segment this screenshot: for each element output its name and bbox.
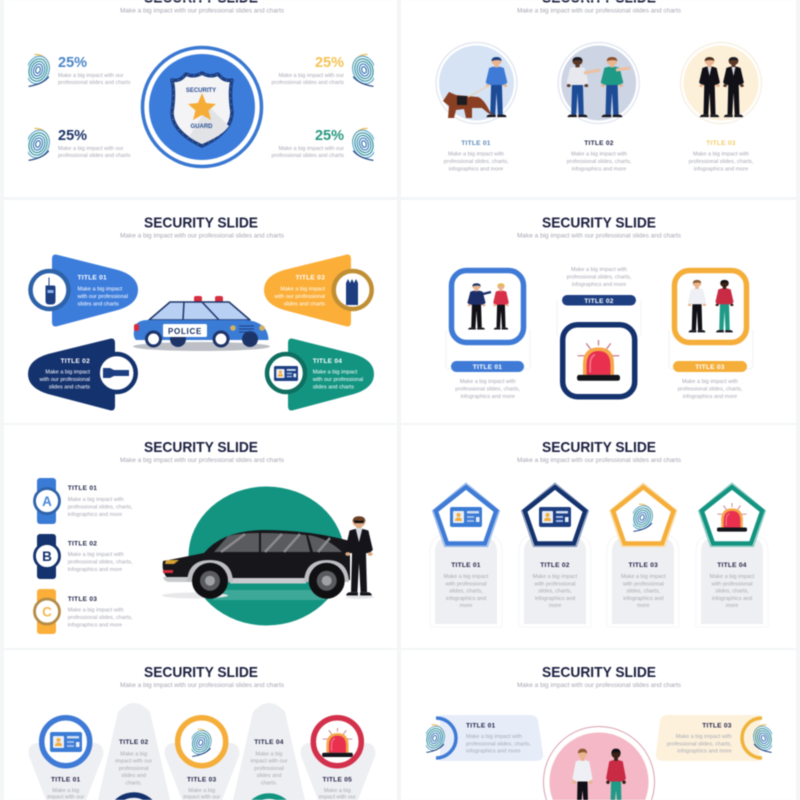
heading: SECURITY SLIDE — [542, 664, 656, 681]
column 04 background — [233, 703, 305, 800]
list item C: infographics and more — [68, 622, 122, 628]
callout: title 04: TITLE 04 — [313, 358, 342, 365]
card 02: with professional — [534, 581, 575, 587]
heading: SECURITY SLIDE — [144, 664, 258, 681]
column 04: professional — [254, 766, 284, 772]
panel: police car — [4, 200, 397, 423]
column 01 — [29, 718, 103, 800]
callout: title 03 — [264, 254, 372, 326]
callout: title 03: Make a big impact — [280, 286, 325, 292]
column 03: Make a big — [188, 788, 215, 794]
card: officer and guest: professional slides, charts, — [678, 386, 743, 392]
callout: title 04: Make a big impact — [313, 370, 358, 376]
title 03: Make a big impact with — [693, 152, 749, 158]
heading: SECURITY SLIDE — [144, 439, 258, 456]
card 04: more — [726, 603, 738, 609]
icon: fingerprint top right — [349, 53, 379, 87]
title 01: Make a big impact with — [448, 152, 504, 158]
card 01: TITLE 01 — [451, 562, 481, 569]
column 04 — [250, 739, 288, 800]
illustration: pink circle with two people — [544, 726, 654, 800]
subheading: Make a big impact with our professional slides and charts — [120, 232, 284, 240]
stat: top left: professional slides and charts — [58, 80, 131, 86]
subheading: Make a big impact with our professional slides and charts — [517, 682, 681, 689]
column 04: slides and — [257, 773, 281, 779]
card: guard and visitor: professional slides, charts, — [455, 386, 521, 392]
subheading: Make a big impact with our professional slides and charts — [120, 457, 284, 464]
stat: bottom left: 25% — [58, 128, 87, 144]
card: title 03: TITLE 03 — [702, 722, 732, 730]
card 03: Make a big impact — [621, 574, 666, 580]
card: alarm beacon — [557, 267, 641, 397]
list item B — [34, 534, 133, 579]
panel: limousine and bodyguard — [4, 425, 397, 648]
title 02 — [567, 140, 632, 172]
card: guard and visitor: infographics and more — [460, 394, 515, 400]
list item C: Make a big impact with — [68, 608, 124, 614]
subheading: Make a big impact with our professional slides and charts — [120, 682, 284, 689]
callout: title 02: with our professional — [39, 377, 90, 383]
callout: title 01 — [30, 254, 138, 326]
column 05 — [301, 718, 375, 800]
illustration: officer and visitor — [558, 42, 639, 124]
card: alarm beacon: Make a big impact with — [571, 267, 627, 273]
list item A: Make a big impact with — [68, 497, 124, 503]
card 02: slides, charts, — [538, 589, 572, 595]
illustration: two bodyguards — [680, 42, 762, 124]
list item A — [34, 478, 133, 524]
callout: title 03: with our professional — [274, 294, 325, 300]
column 04: Make a big — [256, 751, 282, 757]
illustration: guard with dog — [436, 42, 517, 124]
column 02: slides and — [121, 773, 146, 779]
card: title 03 — [656, 715, 776, 761]
card 04 — [696, 483, 768, 627]
card: officer and guest — [669, 270, 753, 400]
callout: title 02 — [28, 338, 136, 410]
list item C: TITLE 03 — [68, 596, 97, 603]
callout: title 04: slides and charts — [313, 384, 354, 390]
title 01: TITLE 01 — [461, 140, 491, 147]
title 01: infographics and more — [449, 166, 503, 172]
card: guard and visitor: Make a big impact with — [460, 379, 516, 385]
card: officer and guest: infographics and more — [683, 394, 737, 400]
card: title 03: infographics and more — [677, 749, 732, 755]
card 01: slides, charts, — [449, 589, 483, 595]
list item C — [34, 589, 133, 634]
column 04: impact with our — [250, 759, 288, 765]
card 02 — [519, 483, 591, 627]
list item A: infographics and more — [68, 512, 122, 518]
card 01: Make a big impact — [444, 574, 489, 580]
card 04: TITLE 04 — [717, 562, 747, 569]
stat: top right: professional slides and charts — [272, 80, 344, 86]
illustration: police car: POLICE — [168, 327, 202, 336]
icon: security guard badge: SECURITY — [186, 88, 216, 94]
subheading: Make a big impact with our professional slides and charts — [120, 8, 284, 14]
stat: top right — [272, 55, 344, 86]
card: alarm beacon: infographics and more — [572, 282, 626, 288]
list item B: Make a big impact with — [68, 552, 124, 558]
card 04: infographics and — [712, 596, 752, 602]
callout: title 04: with our professional — [312, 377, 363, 383]
list item B: B — [42, 549, 52, 564]
heading: SECURITY SLIDE — [144, 214, 258, 232]
stat: bottom right: 25% — [315, 128, 344, 144]
card: officer and guest: Make a big impact with — [682, 379, 738, 385]
icon: security guard badge — [142, 48, 262, 166]
card 03 — [607, 483, 679, 627]
title 01: professional slides, charts, — [444, 159, 509, 165]
card: title 01: professional slides, charts, — [466, 741, 531, 747]
illustration: bodyguard — [345, 516, 374, 599]
card 03: infographics and — [623, 596, 663, 602]
list item C: C — [42, 604, 52, 620]
heading: SECURITY SLIDE — [542, 214, 656, 232]
card 03: TITLE 03 — [629, 562, 658, 569]
callout: title 02: Make a big impact — [45, 370, 90, 376]
card: guard and visitor: TITLE 01 — [473, 364, 502, 371]
callout: title 02: slides and charts — [49, 384, 90, 390]
card 02: TITLE 02 — [540, 562, 570, 569]
list item A: TITLE 01 — [68, 485, 97, 492]
subheading: Make a big impact with our professional slides and charts — [517, 8, 681, 14]
title 03: TITLE 03 — [706, 140, 736, 147]
panel: pentagon cards — [401, 425, 796, 648]
panel: rounded square frames — [401, 200, 796, 423]
column 02: professional — [119, 766, 149, 772]
column 02: charts. — [125, 780, 142, 786]
card 01 — [430, 483, 502, 627]
icon: fingerprint bottom left — [23, 127, 53, 161]
column 01: Make a big — [52, 788, 79, 794]
stat: bottom left: Make a big impact with our — [58, 146, 124, 152]
icon: fingerprint bottom right — [349, 127, 379, 161]
column 05: TITLE 05 — [323, 776, 352, 784]
column 05: Make a big — [324, 788, 351, 794]
callout: title 01: TITLE 01 — [78, 274, 107, 282]
card 03: more — [637, 603, 650, 609]
card: title 03: professional slides, charts, — [667, 741, 732, 747]
stat: bottom left — [58, 128, 131, 159]
subheading: Make a big impact with our professional slides and charts — [517, 232, 681, 240]
card: officer and guest: TITLE 03 — [695, 364, 725, 371]
panel: guard badge statistics — [4, 0, 397, 197]
icon: fingerprint top left — [23, 53, 53, 87]
column 02: TITLE 02 — [119, 739, 149, 746]
stat: bottom left: professional slides and charts — [58, 153, 131, 159]
card 01: infographics and — [446, 596, 486, 602]
card 04: Make a big impact — [710, 574, 755, 580]
card: alarm beacon: TITLE 02 — [584, 298, 614, 305]
card: title 01: infographics and more — [466, 749, 520, 755]
card 01: more — [460, 603, 472, 609]
list item B: infographics and more — [68, 567, 122, 573]
column 02 — [115, 739, 152, 800]
callout: title 03: slides and charts — [284, 302, 325, 308]
title 02: professional slides, charts, — [567, 159, 632, 165]
callout: title 03: TITLE 03 — [296, 274, 325, 282]
card 02: infographics and — [535, 596, 575, 602]
list item A: A — [42, 494, 52, 509]
callout: title 02: TITLE 02 — [61, 358, 90, 365]
stat: bottom right — [272, 128, 344, 159]
title 02: TITLE 02 — [584, 140, 614, 147]
callout: title 01: slides and charts — [78, 302, 119, 308]
stat: bottom right: Make a big impact with our — [279, 146, 344, 152]
column 02: impact with our — [115, 759, 152, 765]
stat: bottom right: professional slides and charts — [272, 153, 344, 159]
card 02: Make a big impact — [533, 574, 578, 580]
card 02: more — [549, 603, 561, 609]
card 03: slides, charts, — [626, 589, 661, 595]
title 03: professional slides, charts, — [689, 159, 754, 165]
callout: title 04 — [267, 338, 374, 410]
card: title 03: Make a big impact with — [676, 734, 732, 740]
card: alarm beacon: professional slides, charts, — [567, 274, 632, 280]
heading: SECURITY SLIDE — [542, 439, 656, 456]
stat: top left: Make a big impact with our — [58, 73, 124, 79]
callout: title 01: Make a big impact — [78, 286, 123, 292]
column 01: TITLE 01 — [51, 776, 81, 784]
column 02 background — [98, 703, 170, 800]
subheading: Make a big impact with our professional slides and charts — [517, 457, 681, 464]
list item B: TITLE 02 — [68, 540, 97, 548]
card: title 01 — [422, 715, 543, 761]
panel: fingerprint cards and pink circle — [401, 650, 796, 800]
icon: security guard badge: GUARD — [190, 124, 213, 130]
title 01 — [444, 140, 509, 172]
column 03 — [165, 718, 239, 800]
illustration: police car — [133, 296, 270, 351]
illustration: teal circle with limousine — [162, 486, 350, 626]
title 02: Make a big impact with — [571, 152, 627, 158]
title 02: infographics and more — [572, 166, 626, 172]
panel: security staff portraits — [401, 0, 796, 197]
stat: top right: 25% — [315, 55, 344, 71]
card 04: slides, charts, — [715, 589, 749, 595]
title 03 — [689, 140, 754, 172]
column 03: TITLE 03 — [187, 776, 217, 784]
panel: alternating circles — [4, 650, 397, 800]
callout: title 01: with our professional — [76, 294, 128, 300]
stat: top left — [58, 55, 131, 86]
list item A: professional slides, charts, — [68, 504, 133, 510]
stat: top right: Make a big impact with our — [279, 73, 344, 79]
column 04: TITLE 04 — [254, 739, 284, 746]
column 04: charts. — [261, 780, 278, 786]
card 03: with professional — [622, 581, 664, 587]
card: title 01: TITLE 01 — [466, 722, 496, 730]
card 04: with professional — [711, 581, 752, 587]
stat: top left: 25% — [58, 55, 87, 71]
card: guard and visitor — [446, 270, 530, 400]
card: title 01: Make a big impact with — [466, 734, 522, 740]
column 02: Make a big — [120, 751, 147, 757]
title 03: infographics and more — [694, 166, 748, 172]
list item B: professional slides, charts, — [68, 559, 133, 565]
card 01: with professional — [445, 581, 486, 587]
list item C: professional slides, charts, — [68, 615, 133, 621]
